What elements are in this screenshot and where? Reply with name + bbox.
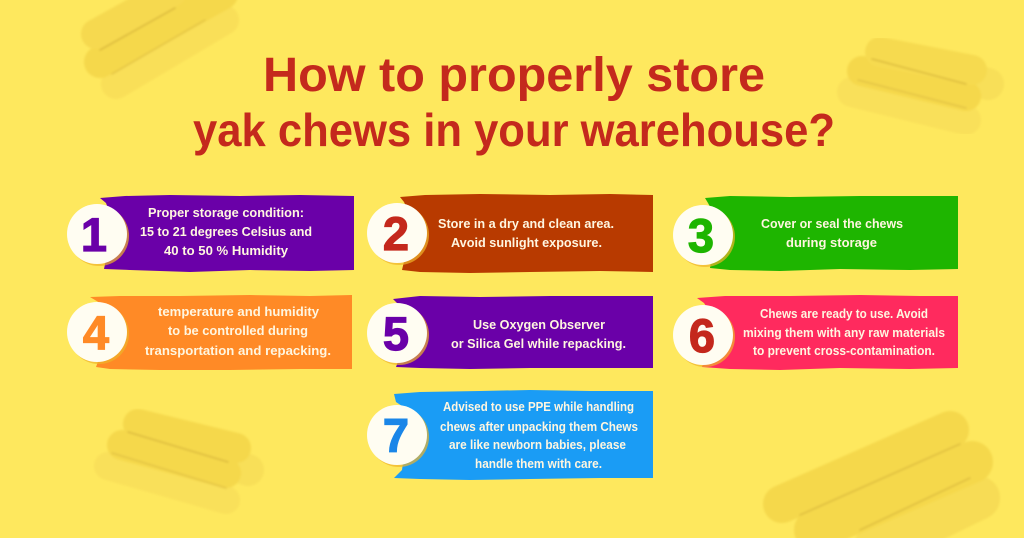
step 2 number: 2 [383,207,409,260]
step 3 text: during storage [786,235,877,250]
step 4 badge [67,302,129,364]
step 2 [367,194,653,273]
step 1 text: 15 to 21 degrees Celsius and [140,224,312,239]
step 5 number: 5 [383,307,409,360]
step 3 text: Cover or seal the chews [761,216,903,231]
step 7 text: handle them with care. [475,456,602,471]
step 6 text: Chews are ready to use. Avoid [760,306,928,321]
step 2 text: Avoid sunlight exposure. [451,235,602,250]
step 2 text [438,216,614,250]
step 4 number: 4 [83,306,109,359]
step 1 bar [100,195,354,272]
title: How to properly store [263,49,765,102]
step 7 text: chews after unpacking them Chews [440,419,638,434]
step 6 badge [673,305,735,367]
step 3 bar [705,196,958,271]
step 7 [367,390,653,480]
step 2 text: Store in a dry and clean area. [438,216,614,231]
decoration: yak chews top left [96,0,224,84]
step 5 text: or Silica Gel while repacking. [451,336,626,351]
step 6 [673,295,958,370]
step 5 badge [367,303,429,365]
step 4 text: transportation and repacking. [145,343,331,358]
step 5 [367,296,653,369]
step 3 [673,196,958,271]
step 4 text: to be controlled during [168,323,308,338]
step 7 badge [367,405,429,467]
step 6 text: mixing them with any raw materials [743,325,945,340]
step 4 [67,295,352,370]
step 7 text: Advised to use PPE while handling [443,399,634,414]
step 7 bar [394,390,653,480]
step 5 text: Use Oxygen Observer [473,317,605,332]
decoration: yak chews bottom right [782,430,978,538]
step 1 [67,195,354,272]
step 5 text [451,317,626,351]
step 7 text: are like newborn babies, please [449,437,626,452]
step 6 text: to prevent cross-contamination. [753,343,935,358]
step 7 text [440,399,638,471]
title: yak chews in your warehouse? [193,104,835,156]
step 3 number: 3 [688,209,714,262]
step 7 number: 7 [383,409,409,462]
step 3 badge [673,205,735,267]
title [193,49,835,156]
decoration: yak chews top right [852,52,988,120]
step 1 badge [67,204,129,266]
step 6 number: 6 [689,309,715,362]
step 4 bar [90,295,352,370]
step 1 text: Proper storage condition: [148,205,304,220]
step 5 bar [393,296,653,369]
step 1 number: 1 [81,208,107,261]
step 2 badge [367,203,429,265]
step 6 text [743,306,945,358]
step 3 text [761,216,903,250]
step 6 bar [697,295,958,370]
step 4 text: temperature and humidity [158,304,320,319]
decoration: yak chews bottom left [108,424,248,500]
step 2 bar [400,194,653,273]
step 4 text [145,304,331,358]
step 1 text [140,205,312,258]
step 1 text: 40 to 50 % Humidity [164,243,289,258]
